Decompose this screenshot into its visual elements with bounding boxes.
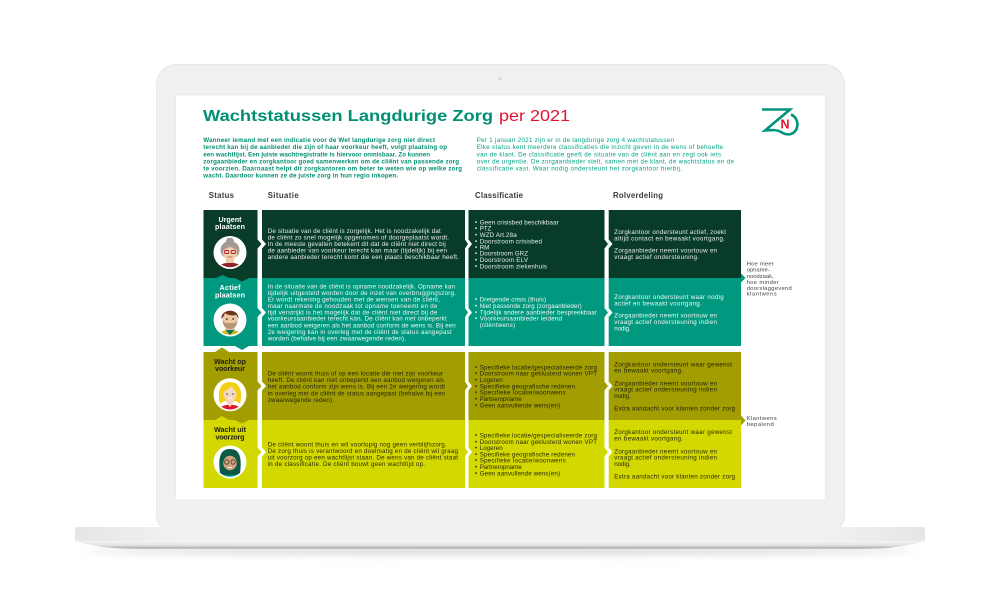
row 4 situation text: De cliënt woont thuis en wil voorlopig nog geen verblijfszorg. <box>268 442 447 449</box>
title <box>203 108 570 125</box>
row 2 classification list: • <box>475 309 477 316</box>
row 4 status label <box>214 425 247 441</box>
title: Wachtstatussen Langdurige Zorg <box>203 108 493 125</box>
row 4 classification list: • <box>475 458 477 465</box>
row 2 classification list: Tijdelijk andere aanbieder bespreekbaar <box>480 309 597 316</box>
row 2 situation text: een aanbod weigeren als het aanbod conform de wens is. Bij een <box>268 322 456 329</box>
row 1 status label <box>215 215 245 231</box>
row 4 roles: Zorgkantoor ondersteunt waar gewenst <box>614 429 732 436</box>
row 4 classification list: Specifieke geografische redenen <box>480 452 576 459</box>
intro text right: Per 1 januari 2021 zijn er in de langdurige zorg 4 wachtstatussen <box>477 137 675 144</box>
row 2 situation text: tijd verstrijkt is het mogelijk dat de cliënt niet direct bij de <box>268 309 438 316</box>
row 3 classification list: Specifieke locatie/gespecialiseerde zorg <box>480 364 598 371</box>
row 2 classification list: • <box>475 303 477 310</box>
row 1 status label: Urgent <box>218 215 242 224</box>
camera <box>498 78 502 80</box>
row 4 roles: nodig. <box>614 461 631 468</box>
row 3 classification list <box>475 364 598 409</box>
row 1 situation text: de cliënt zo snel mogelijk opgenomen of doorgeplaatst wordt. <box>268 234 449 242</box>
row 1 situation text: de aanbieder van voorkeur terecht kan maar (tijdelijk) bij een <box>268 247 448 254</box>
side note: client wish: bepalend <box>747 422 774 428</box>
intro text left: terecht kan bij de aanbieder die zijn of haar voorkeur heeft, volgt plaatsing op <box>203 144 447 151</box>
row 2 situation text: worden (behalve bij een zwaarwegende reden). <box>267 336 406 343</box>
row 3 classification list: • <box>475 383 477 390</box>
row 2 classification list: (cliëntwens) <box>480 322 515 329</box>
row 1 classification list: Doorstroom GRZ <box>480 251 528 258</box>
row 2 classification list: Dreigende crisis (thuis) <box>480 297 546 304</box>
title: per 2021 <box>499 108 570 125</box>
column headings: Classificatie <box>475 191 524 200</box>
row 3 classification list: Geen aanvullende wens(en) <box>480 402 560 409</box>
row 2 classification list: Niet passende zorg (zorgaanbieder) <box>480 303 582 310</box>
row 3 classification list: • <box>475 377 477 384</box>
row 3 classification list: Specifieke geografische redenen <box>480 383 576 390</box>
row 4 situation text: uit voorzorg op een wachtlijst staan. De wens van de cliënt staat <box>268 454 458 461</box>
side note: urgency <box>747 262 792 298</box>
row 2 situation text: voorkeursaanbieder terecht kan. De cliënt kan niet onbeperkt <box>268 316 447 323</box>
row 2 roles: Zorgkantoor ondersteunt waar nodig <box>614 294 724 301</box>
row 1 classification list: • <box>475 257 477 264</box>
row 1 classification list: Doorstroom ELV <box>480 257 529 264</box>
intro text right: classificatie vast. Waar nodig ondersteunt het zorgkantoor hierbij. <box>477 166 682 173</box>
row 1 roles: altijd contact en bewaakt voortgang. <box>614 235 725 242</box>
row 1 classification list: • <box>475 226 477 233</box>
row 3 situation text: De cliënt woont thuis of op een locatie die niet zijn voorkeur <box>268 370 443 377</box>
row 4 classification list: • <box>475 432 477 439</box>
avatar: man with beard <box>214 304 246 336</box>
row 4 status label: Wacht uit <box>214 425 247 434</box>
row 2 panels <box>204 274 746 350</box>
row 2 classification list: • <box>475 316 477 323</box>
avatar: blonde woman <box>214 378 246 411</box>
row 4 classification list: • <box>475 439 477 446</box>
screen <box>176 95 826 500</box>
row 1 roles: Zorgaanbieder neemt voortouw en <box>614 248 718 255</box>
row 1 classification list: Doorstroom crisisbed <box>480 238 543 245</box>
row: actief plaatsen <box>204 274 746 350</box>
avatar: older woman <box>214 236 246 270</box>
row 2 classification list: Voorkeursaanbieder leidend <box>480 316 563 323</box>
row 1 classification list: • <box>475 219 477 226</box>
row 4 classification list: Doorstroom naar geklusterd wonen VPT <box>480 439 597 446</box>
row 2 status label <box>215 283 245 299</box>
row 3 situation text: het aanbod conform zijn wens is. Bij een 2e weigering wordt <box>268 384 445 391</box>
row 3 roles: Zorgaanbieder neemt voortouw en <box>614 380 718 387</box>
logo: ZN <box>762 110 797 134</box>
row 1 classification list: Geen crisisbed beschikbaar <box>480 219 559 226</box>
row 3 roles: en bewaakt voortgang. <box>614 368 683 375</box>
row 4 chevrons <box>262 448 612 456</box>
row 3 situation text <box>268 370 446 404</box>
row 2 classification list <box>475 297 597 329</box>
row 1 classification list: PTZ <box>480 226 492 233</box>
row 4 panels <box>204 416 741 488</box>
row 3 status label <box>214 357 247 373</box>
row 3 classification list: Doorstroom naar geklusterd wonen VPT <box>480 371 597 378</box>
row 3 roles <box>614 361 736 413</box>
row 3 classification list: • <box>475 364 477 371</box>
side note: urgency: doorslaggevend <box>747 286 792 292</box>
row 3 roles: Zorgkantoor ondersteunt waar gewenst <box>614 361 732 368</box>
row 4 situation text: in de classificatie. De cliënt bouwt geen wachttijd op. <box>268 461 425 468</box>
laptop lid <box>156 64 844 534</box>
intro text left: Wanneer iemand met een indicatie voor de Wet langdurige zorg niet direct <box>203 137 435 144</box>
side note: urgency: noodzaak, <box>747 274 774 280</box>
row 3 situation text: in overleg met de cliënt de status aangepast (behalve bij een <box>268 390 446 397</box>
row 1 panels <box>204 210 741 278</box>
intro text left: een wachtlijst. Een juiste wachtregistratie is hiervoor onmisbaar. Zo kunnen <box>203 151 430 158</box>
row 2 roles: nodig. <box>614 325 631 332</box>
row 3 status label: voorkeur <box>215 364 245 373</box>
column headings <box>209 191 663 200</box>
row 2 situation text: In de situatie van de cliënt is opname noodzakelijk. Opname kan <box>268 284 456 291</box>
row 3 classification list: Logeren <box>480 377 503 384</box>
row 3 roles: Extra aandacht voor klanten zonder zorg <box>614 406 736 413</box>
row 1 roles: Zorgkantoor ondersteunt actief, zoekt <box>614 229 726 236</box>
logo: ZN: N <box>780 118 790 132</box>
row 1 roles <box>614 229 726 261</box>
intro text left <box>202 137 462 180</box>
row 3 classification list: • <box>475 402 477 409</box>
row 1 classification list: • <box>475 264 477 271</box>
row 4 classification list: Logeren <box>480 445 503 452</box>
row 1 classification list: Doorstroom ziekenhuis <box>480 264 547 271</box>
intro text right: over de urgentie. De zorgaanbieder stelt, samen met de klant, de wachtstatus en de <box>477 158 735 165</box>
row 4 situation text <box>268 442 459 468</box>
row 1 classification list <box>475 219 559 271</box>
row 4 situation text: De zorg thuis is verantwoord en doelmatig en de cliënt wil graag <box>268 448 459 455</box>
row 3 situation text: heeft. De cliënt kan niet onbeperkt een aanbod weigeren als <box>268 377 444 384</box>
row 1 status label: plaatsen <box>215 222 245 231</box>
row 1 classification list: WZD Art.28a <box>480 232 517 239</box>
row 4 roles: Extra aandacht voor klanten zonder zorg <box>614 474 736 481</box>
row 1 classification list: • <box>475 245 477 252</box>
row 3 roles: vraagt actief ondersteuning indien <box>614 387 718 394</box>
row 2 roles: vraagt actief ondersteuning indien <box>614 319 718 326</box>
row 2 chevrons <box>262 308 612 317</box>
side note: client wish: Klantwens <box>747 416 777 422</box>
row 2 situation text: maar naarmate de noodzaak tot opname toeneemt en de <box>268 303 438 310</box>
row 1 classification list: • <box>475 238 477 245</box>
row 3 classification list: • <box>475 371 477 378</box>
row 1 chevrons <box>262 240 612 248</box>
row 3 notches <box>235 416 746 426</box>
intro text left: te voorzien. Daarnaast helpt dit zorgkantoren om beter te weten wie op welke zorg <box>203 166 462 173</box>
row 3 classification list: • <box>475 390 477 397</box>
row 4 classification list: • <box>475 452 477 459</box>
row 4 roles: Zorgaanbieder neemt voortouw en <box>614 448 718 455</box>
row 1 notch <box>235 278 249 282</box>
row 3 classification list: Specifieke locatie/woonwens <box>480 390 566 397</box>
row 4 classification list: • <box>475 445 477 452</box>
row 4 roles: vraagt actief ondersteuning indien <box>614 455 718 462</box>
row 2 roles <box>614 294 724 332</box>
row: wacht uit voorzorg <box>204 416 746 488</box>
row 3 classification list: • <box>475 396 477 403</box>
row 1 classification list: • <box>475 251 477 258</box>
laptop <box>75 64 925 554</box>
intro text left: zorgaanbieder en zorgkantoor goed samenwerken om de cliënt van passende zorg <box>203 158 459 165</box>
row 2 status label: plaatsen <box>215 290 245 299</box>
row 2 roles: Zorgaanbieder neemt voortouw en <box>614 313 718 320</box>
row 1 roles: vraagt actief ondersteuning. <box>614 254 699 261</box>
intro text right <box>477 137 735 173</box>
row 4 classification list: Specifieke locatie/gespecialiseerde zorg <box>480 432 598 439</box>
row 4 classification list: • <box>475 470 477 477</box>
row 4 roles: en bewaakt voortgang. <box>614 436 683 443</box>
column headings: Rolverdeling <box>613 191 663 200</box>
avatar: woman with headscarf <box>214 446 246 478</box>
row 3 panels <box>204 348 741 420</box>
side note: urgency: hoe minder <box>747 280 779 286</box>
row 1 classification list: • <box>475 232 477 239</box>
intro text right: van de klant. De classificatie geeft de situatie van de cliënt aan en zegt ook iets <box>477 151 721 158</box>
column headings: Situatie <box>268 191 299 200</box>
row 4 classification list: Geen aanvullende wens(en) <box>480 470 560 477</box>
row 2 situation text: Er wordt rekening gehouden met de wensen van de cliënt, <box>268 297 440 304</box>
row 1 situation text <box>268 228 459 261</box>
row 4 status label: voorzorg <box>216 432 244 441</box>
row 4 classification list: Partneropname <box>480 464 522 471</box>
side note: urgency: opname- <box>747 268 770 274</box>
row 3 situation text: zwaarwegende reden). <box>268 397 334 404</box>
row 3 roles: nodig. <box>614 393 631 400</box>
row 4 classification list: Specifieke locatie/woonwens <box>480 458 566 465</box>
row 4 classification list <box>475 432 598 477</box>
row 1 situation text: andere aanbieder terecht komt die een plaats beschikbaar heeft. <box>268 254 459 261</box>
laptop base <box>75 527 925 549</box>
row 4 roles <box>614 429 736 481</box>
row 2 situation text: 2e weigering kan in overleg met de cliënt de status aangepast <box>268 329 452 336</box>
intro text right: Elke status kent meerdere classificaties die inzicht geven in de wens of behoefte <box>477 144 724 151</box>
row 2 roles: actief en bewaakt voortgang. <box>614 300 702 307</box>
intro text left: wacht. Daardoor kunnen ze de juiste zorg in hun regio inkopen. <box>202 173 398 180</box>
row: urgent plaatsen <box>204 210 741 278</box>
side note: urgency: Hoe meer <box>747 262 774 268</box>
row: wacht op voorkeur <box>204 348 741 420</box>
column headings: Status <box>209 191 235 200</box>
side note: client wish <box>747 416 777 428</box>
row 2 status label: Actief <box>220 283 241 292</box>
row 4 classification list: • <box>475 464 477 471</box>
row 3 status label: Wacht op <box>214 357 247 366</box>
row 2 situation text <box>267 284 456 343</box>
row 3 classification list: Partneropname <box>480 396 522 403</box>
row 1 classification list: RM <box>480 245 489 252</box>
row 2 classification list: • <box>475 297 477 304</box>
row 1 situation text: In de meeste gevallen betekent dit dat de cliënt niet direct bij <box>268 241 446 248</box>
row 2 situation text: tijdelijk uitgesteld worden door de inzet van overbruggingszorg. <box>268 290 456 297</box>
row 1 situation text: De situatie van de cliënt is zorgelijk. Het is noodzakelijk dat <box>268 228 441 235</box>
row 3 chevrons <box>262 382 612 390</box>
side note: urgency: klantwens <box>747 292 777 298</box>
